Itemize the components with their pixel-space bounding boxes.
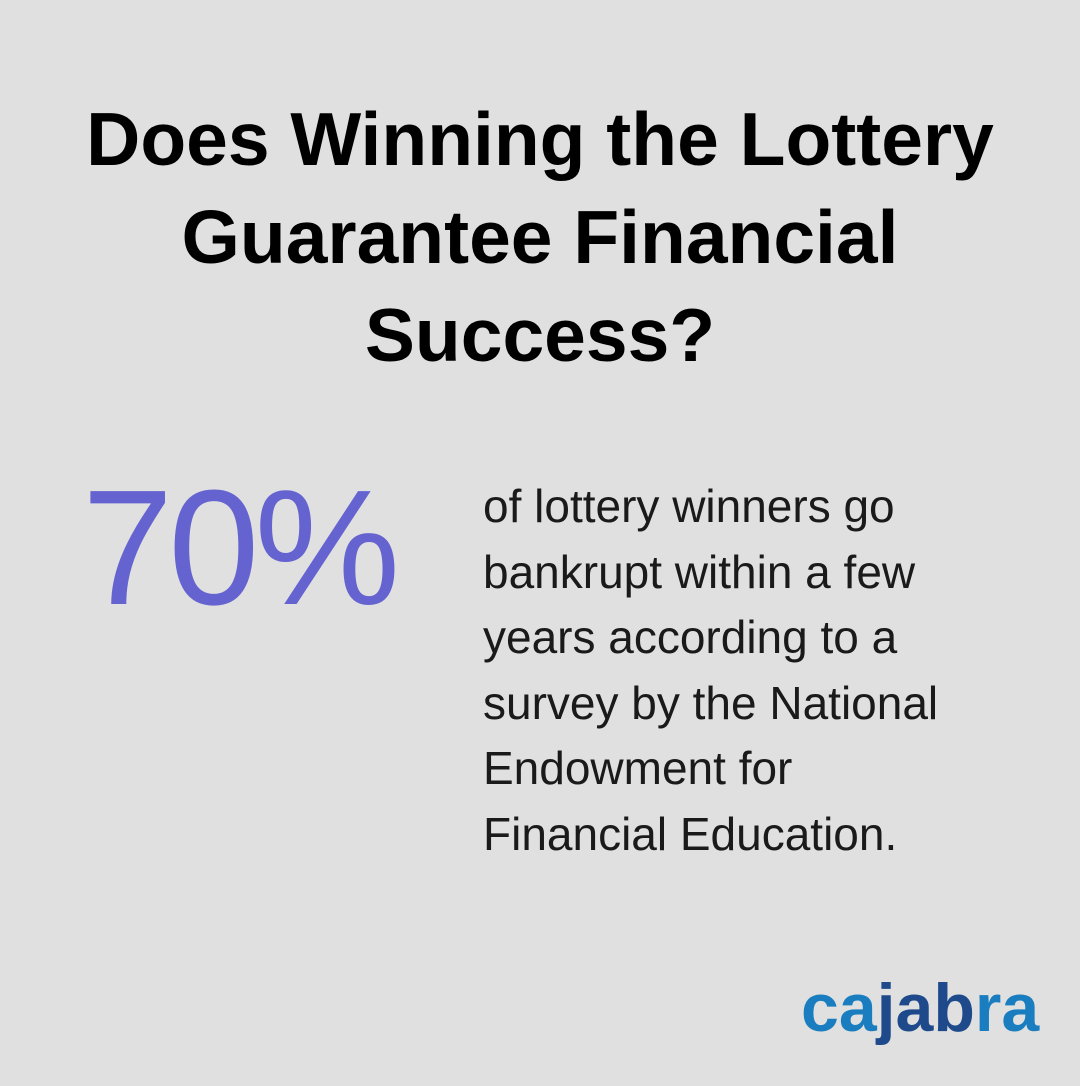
description text: of lottery winners go bbox=[483, 480, 895, 532]
description text bbox=[483, 480, 938, 860]
big statistic: 70%: 70% bbox=[82, 456, 395, 639]
title: Guarantee Financial bbox=[182, 195, 898, 279]
description text: Endowment for bbox=[483, 742, 792, 794]
description text: bankrupt within a few bbox=[483, 546, 915, 598]
description text: Financial Education. bbox=[483, 808, 897, 860]
title: Success? bbox=[365, 293, 715, 377]
title bbox=[86, 97, 994, 377]
title: Does Winning the Lottery bbox=[86, 97, 994, 181]
description text: survey by the National bbox=[483, 676, 938, 728]
logo: cajabra: cajabra bbox=[801, 970, 1039, 1046]
description text: years according to a bbox=[483, 611, 897, 663]
